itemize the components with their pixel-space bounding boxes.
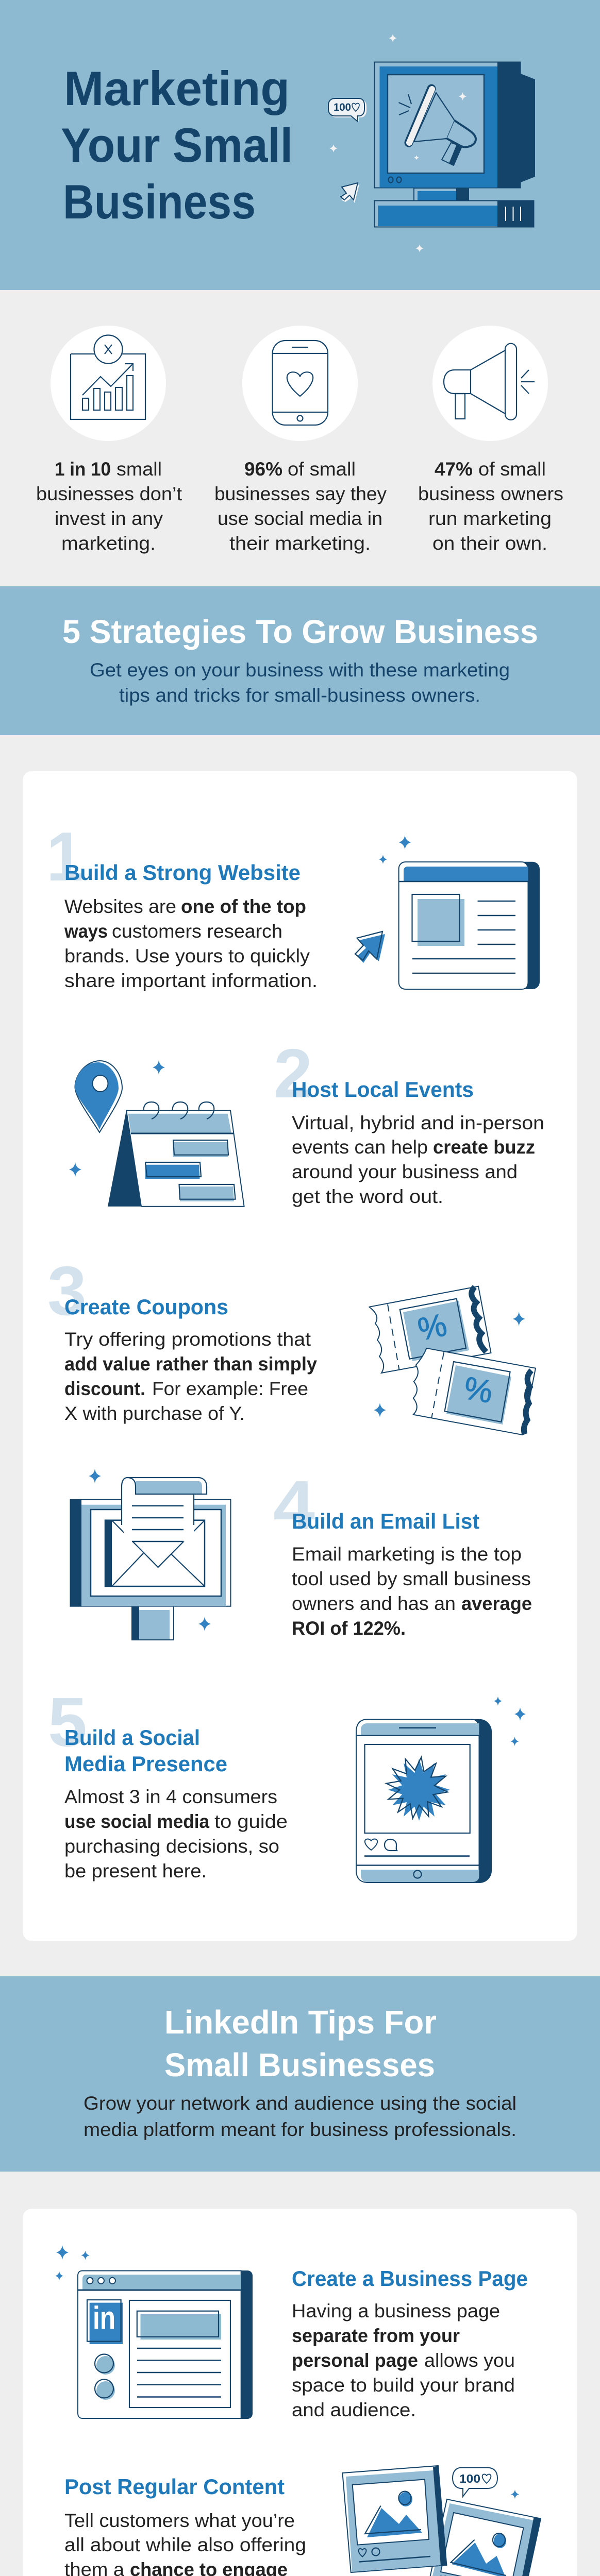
stat: 96%	[214, 326, 387, 554]
tip 1: space to build your brand	[292, 2375, 515, 2396]
text: business owners	[418, 483, 563, 504]
strategy 5: to guide	[214, 1811, 288, 1832]
strategy 3	[47, 1252, 536, 1435]
strategy 5: purchasing decisions, so	[64, 1836, 279, 1857]
strategy 2: create buzz	[433, 1137, 535, 1158]
strategy 1: one of the top	[181, 896, 306, 917]
text: of small	[288, 459, 356, 480]
text: use social media in	[218, 508, 382, 529]
tip 1: Having a business page	[292, 2300, 500, 2321]
text: of small	[478, 459, 546, 480]
strategy 3: 3	[47, 1252, 87, 1330]
strategy 5: use social media	[64, 1811, 209, 1832]
banner: 5 strategies: Get eyes on your business with these marketing	[90, 659, 510, 681]
strategy 3: discount.	[64, 1378, 145, 1399]
strategy 3: Try offering promotions that	[64, 1329, 311, 1350]
strategy 2: events can help	[292, 1137, 428, 1158]
strategy 1: ways	[64, 921, 108, 942]
sparkles	[329, 34, 467, 252]
strategy 1: Build a Strong Website	[64, 860, 301, 885]
text: run marketing	[428, 508, 552, 529]
text: 96%	[244, 459, 282, 480]
icon: phone with heart	[273, 341, 328, 425]
text: marketing.	[61, 533, 156, 554]
icon: coupons	[369, 1286, 536, 1435]
strategy 4: average	[461, 1593, 532, 1614]
banner: 5 strategies: 5 Strategies To Grow Business	[62, 613, 538, 650]
icon: photo posts: 100	[459, 2472, 480, 2485]
icon: linkedin page window: in	[93, 2300, 115, 2336]
strategy 3: For example: Free	[152, 1378, 308, 1399]
tip 1: allows you	[424, 2350, 515, 2371]
stat: 1 in 10	[36, 326, 182, 554]
icon: computer with megaphone	[374, 62, 535, 227]
text: businesses don’t	[36, 483, 182, 504]
strategy 2: Virtual, hybrid and in-person	[292, 1112, 544, 1133]
strategy 5: 5	[48, 1683, 87, 1761]
banner: linkedin tips: Small Businesses	[164, 2046, 435, 2083]
tip 2	[64, 2466, 541, 2576]
strategy 4: 4	[273, 1466, 315, 1544]
strategy 2: get the word out.	[292, 1186, 443, 1207]
strategy 5	[48, 1683, 526, 1883]
strategy 5: Media Presence	[64, 1752, 227, 1776]
strategy 5: Build a Social	[64, 1725, 200, 1750]
panel: strategies card	[23, 771, 577, 1941]
strategy 4: owners and has an	[292, 1593, 456, 1614]
icon: like bubble	[328, 98, 366, 122]
strategy 4: ROI of 122%.	[292, 1618, 406, 1639]
text: 1 in 10	[55, 459, 111, 480]
tip 1	[55, 2245, 528, 2420]
banner: linkedin tips: media platform meant for business professionals.	[84, 2119, 516, 2140]
icon: email on monitor	[70, 1469, 231, 1640]
icon: map pin and calendar	[69, 1060, 244, 1207]
strategy 3: add value rather than simply	[64, 1353, 317, 1375]
strategy 5: Almost 3 in 4 consumers	[64, 1786, 277, 1807]
icon: coupons: %	[461, 1370, 495, 1410]
banner: linkedin tips: Grow your network and audience using the social	[84, 2093, 516, 2114]
tip 2: Post Regular Content	[64, 2475, 285, 2499]
strategy 1: customers research	[112, 921, 282, 942]
strategy 4: Email marketing is the top	[292, 1544, 522, 1565]
icon: cursor	[341, 183, 359, 203]
hero panel	[0, 0, 600, 290]
icon: chart with x	[71, 335, 145, 419]
icon: linkedin page window	[55, 2245, 253, 2419]
strategy 3: Create Coupons	[64, 1295, 228, 1319]
tip 1: Create a Business Page	[292, 2266, 528, 2291]
strategy 1: 1	[46, 818, 84, 895]
strategy 5: be present here.	[64, 1860, 207, 1882]
icon: like bubble: 100	[334, 101, 351, 113]
banner: linkedin tips: LinkedIn Tips For	[164, 2004, 437, 2041]
stat: 47%	[418, 326, 563, 554]
icon: website window and cursor	[355, 835, 540, 989]
icon: coupons: %	[415, 1307, 450, 1348]
text	[36, 459, 182, 554]
strategy 1: brands. Use yours to quickly	[64, 945, 310, 967]
strategy 4: tool used by small business	[292, 1568, 531, 1589]
strategy 1	[46, 818, 540, 991]
title: Marketing	[64, 61, 290, 115]
banner: 5 strategies: tips and tricks for small-business owners.	[119, 685, 480, 706]
strategy 1: Websites are	[64, 896, 176, 917]
strategy 4	[70, 1466, 532, 1640]
strategy 2: 2	[274, 1035, 312, 1112]
title: Your Small	[61, 118, 293, 172]
text: invest in any	[55, 508, 163, 529]
text	[214, 459, 387, 554]
banner: 5 strategies	[0, 586, 600, 735]
text: their marketing.	[229, 533, 371, 554]
panel: linkedin tips card	[23, 2209, 577, 2576]
banner: linkedin tips	[0, 1976, 600, 2172]
strategy 2	[69, 1035, 544, 1207]
tip 1: and audience.	[292, 2399, 416, 2420]
tip 1: separate from your	[292, 2325, 460, 2346]
strategy 1: share important information.	[64, 970, 318, 991]
text: on their own.	[432, 533, 547, 554]
text	[418, 459, 563, 554]
strategy 2: around your business and	[292, 1161, 518, 1182]
tip 1: personal page	[292, 2350, 418, 2371]
text: businesses say they	[214, 483, 387, 504]
icon: phone with social post	[356, 1697, 526, 1883]
strategy 2: Host Local Events	[292, 1077, 474, 1101]
icon: photo posts	[342, 2466, 541, 2576]
title	[61, 61, 293, 229]
icon: megaphone	[444, 344, 535, 420]
strategy 4: Build an Email List	[292, 1509, 479, 1533]
title: Business	[63, 175, 256, 229]
tip 2: Tell customers what you’re	[64, 2510, 295, 2531]
text: small	[116, 459, 162, 480]
tip 2: all about while also offering	[64, 2534, 306, 2555]
strategy 3: X with purchase of Y.	[64, 1403, 245, 1424]
text: 47%	[435, 459, 473, 480]
